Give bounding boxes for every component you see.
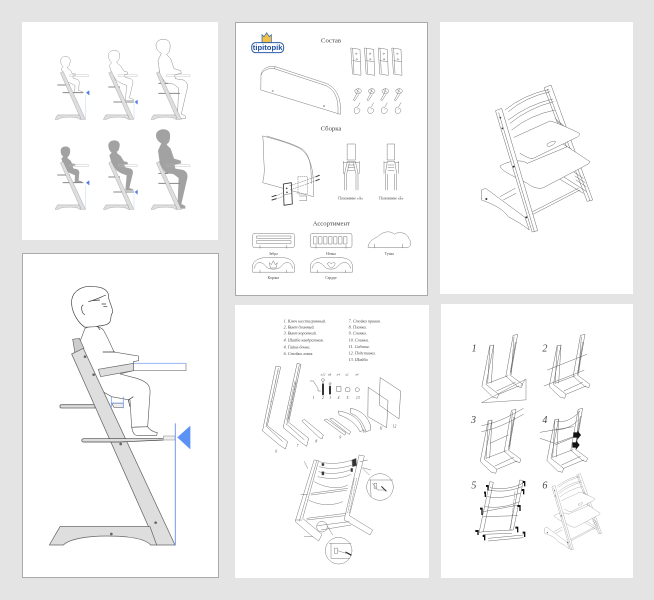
step 1: [472, 334, 526, 403]
icon: blue triangle marker: [177, 426, 190, 449]
icon: black fasteners: [475, 481, 525, 540]
variant: Ночка: Ночка: [326, 252, 336, 256]
step 5: [471, 480, 525, 541]
footrest: [82, 436, 175, 442]
part numbers: 13: [356, 396, 360, 400]
part numbers: 11: [379, 426, 383, 430]
variant: Сердце: Сердце: [325, 276, 337, 280]
parts list: 7. Стойка правая.: [349, 318, 381, 323]
part numbers: 9: [339, 435, 341, 439]
depth measure: [111, 397, 123, 408]
variant: Корона: [253, 257, 294, 280]
assembled frame: [295, 455, 373, 541]
footrest plate: [379, 378, 401, 419]
back bar: [60, 405, 95, 408]
heading: Ассортимент: Ассортимент: [313, 220, 350, 227]
heading: Сборка: Сборка: [321, 126, 341, 133]
label: Положение «Б»: Положение «Б»: [379, 196, 404, 200]
parts list: [284, 318, 381, 362]
chair with child 1 silhouette: [55, 146, 89, 209]
variant: Тучка: [368, 232, 411, 256]
step 3: [470, 408, 523, 473]
quantity labels: x2: [344, 373, 349, 377]
part numbers: [275, 396, 396, 453]
logo: tipitopik: tipitopik: [253, 43, 283, 52]
quantity labels: x4: [336, 373, 340, 377]
panel: child seated on chair with measurements: [22, 254, 218, 578]
seat plate: [368, 387, 388, 428]
cross bars: [302, 418, 351, 439]
chair drawing: [482, 85, 593, 232]
logo: tipitopik: [252, 33, 284, 53]
parts list: 3. Винт короткий.: [284, 331, 317, 336]
quantity labels: [320, 373, 359, 377]
part numbers: 12: [393, 425, 396, 429]
chair with child 1 outline: [55, 56, 89, 119]
part numbers: 3: [329, 396, 331, 400]
step 6: 6: [542, 480, 547, 491]
back slats: [339, 408, 370, 432]
parts list: 10. Спинка.: [349, 337, 369, 342]
part numbers: 5: [347, 396, 349, 400]
panel: parts list and exploded view: [235, 305, 429, 578]
parts list: 6. Стойка левая.: [284, 351, 313, 356]
step 2: 2: [542, 344, 547, 355]
variant: Зебра: [253, 233, 294, 256]
parts list: 4. Гайка-бочка.: [284, 344, 310, 349]
panel: backrest parts and assortment: [236, 22, 428, 296]
parts list: 9. Спинка.: [349, 331, 367, 336]
step 3: 3: [470, 415, 476, 426]
part numbers: 4: [338, 396, 340, 400]
parts list: 11. Сиденье.: [349, 344, 370, 349]
step 4: [540, 408, 588, 472]
position A diagram: [343, 144, 359, 190]
child figure: [72, 286, 157, 436]
chair with child 3 outline: [151, 39, 190, 119]
panel: sitting growth chart: [22, 22, 218, 240]
part numbers: 8: [315, 440, 317, 444]
chair with child 2 outline: [103, 50, 138, 119]
step 6: [542, 473, 602, 550]
step 2: [542, 334, 590, 398]
heading: Состав: Состав: [321, 37, 341, 44]
label: Положение «А»: Положение «А»: [338, 196, 363, 200]
backrest panel: [261, 66, 340, 114]
parts list: 8. Планка.: [349, 324, 367, 329]
variant: Корона: Корона: [268, 276, 279, 280]
icon: black arrows: [572, 430, 581, 450]
quantity labels: x8: [327, 373, 331, 377]
assembly drawing: [263, 136, 319, 205]
panel: assembly steps: [441, 304, 633, 578]
variant: Ночка: [310, 233, 352, 256]
part numbers: 1: [313, 396, 315, 400]
chair with child 2 silhouette: [103, 140, 138, 209]
quantity labels: x4: [354, 373, 359, 377]
step 4: 4: [542, 415, 547, 426]
tray: [96, 363, 186, 371]
variant: Зебра: Зебра: [269, 252, 278, 256]
detail circle: [367, 474, 393, 500]
variant: Тучка: Тучка: [385, 252, 394, 256]
parts list: 13. Шайба.: [349, 357, 369, 362]
panel: isometric chair: [440, 22, 633, 294]
chair side profile: [49, 338, 175, 545]
brackets: [351, 48, 402, 75]
quantity labels: x12: [320, 373, 326, 377]
part numbers: 10: [363, 429, 366, 433]
hardware parts: [310, 379, 359, 394]
part numbers: 7: [297, 444, 299, 448]
parts list: 2. Винт длинный.: [284, 324, 315, 329]
screws: [353, 89, 402, 101]
parts list: 12. Подставка.: [349, 351, 376, 356]
variant: Сердце: [310, 257, 352, 280]
detail circle lower: [325, 537, 352, 564]
hooks: [354, 103, 401, 113]
step 1: 1: [472, 344, 477, 355]
part numbers: 6: [275, 449, 277, 453]
height line: [174, 423, 177, 545]
parts list: 1. Ключ шестигранный.: [284, 318, 326, 323]
parts list: 4. Шайба квадратная.: [284, 337, 324, 342]
chair with child 3 silhouette: [151, 129, 190, 209]
left post: [263, 366, 288, 449]
part numbers: 2: [322, 396, 324, 400]
position B diagram: [384, 144, 399, 190]
step 5: 5: [471, 480, 476, 491]
right post: [283, 363, 309, 446]
